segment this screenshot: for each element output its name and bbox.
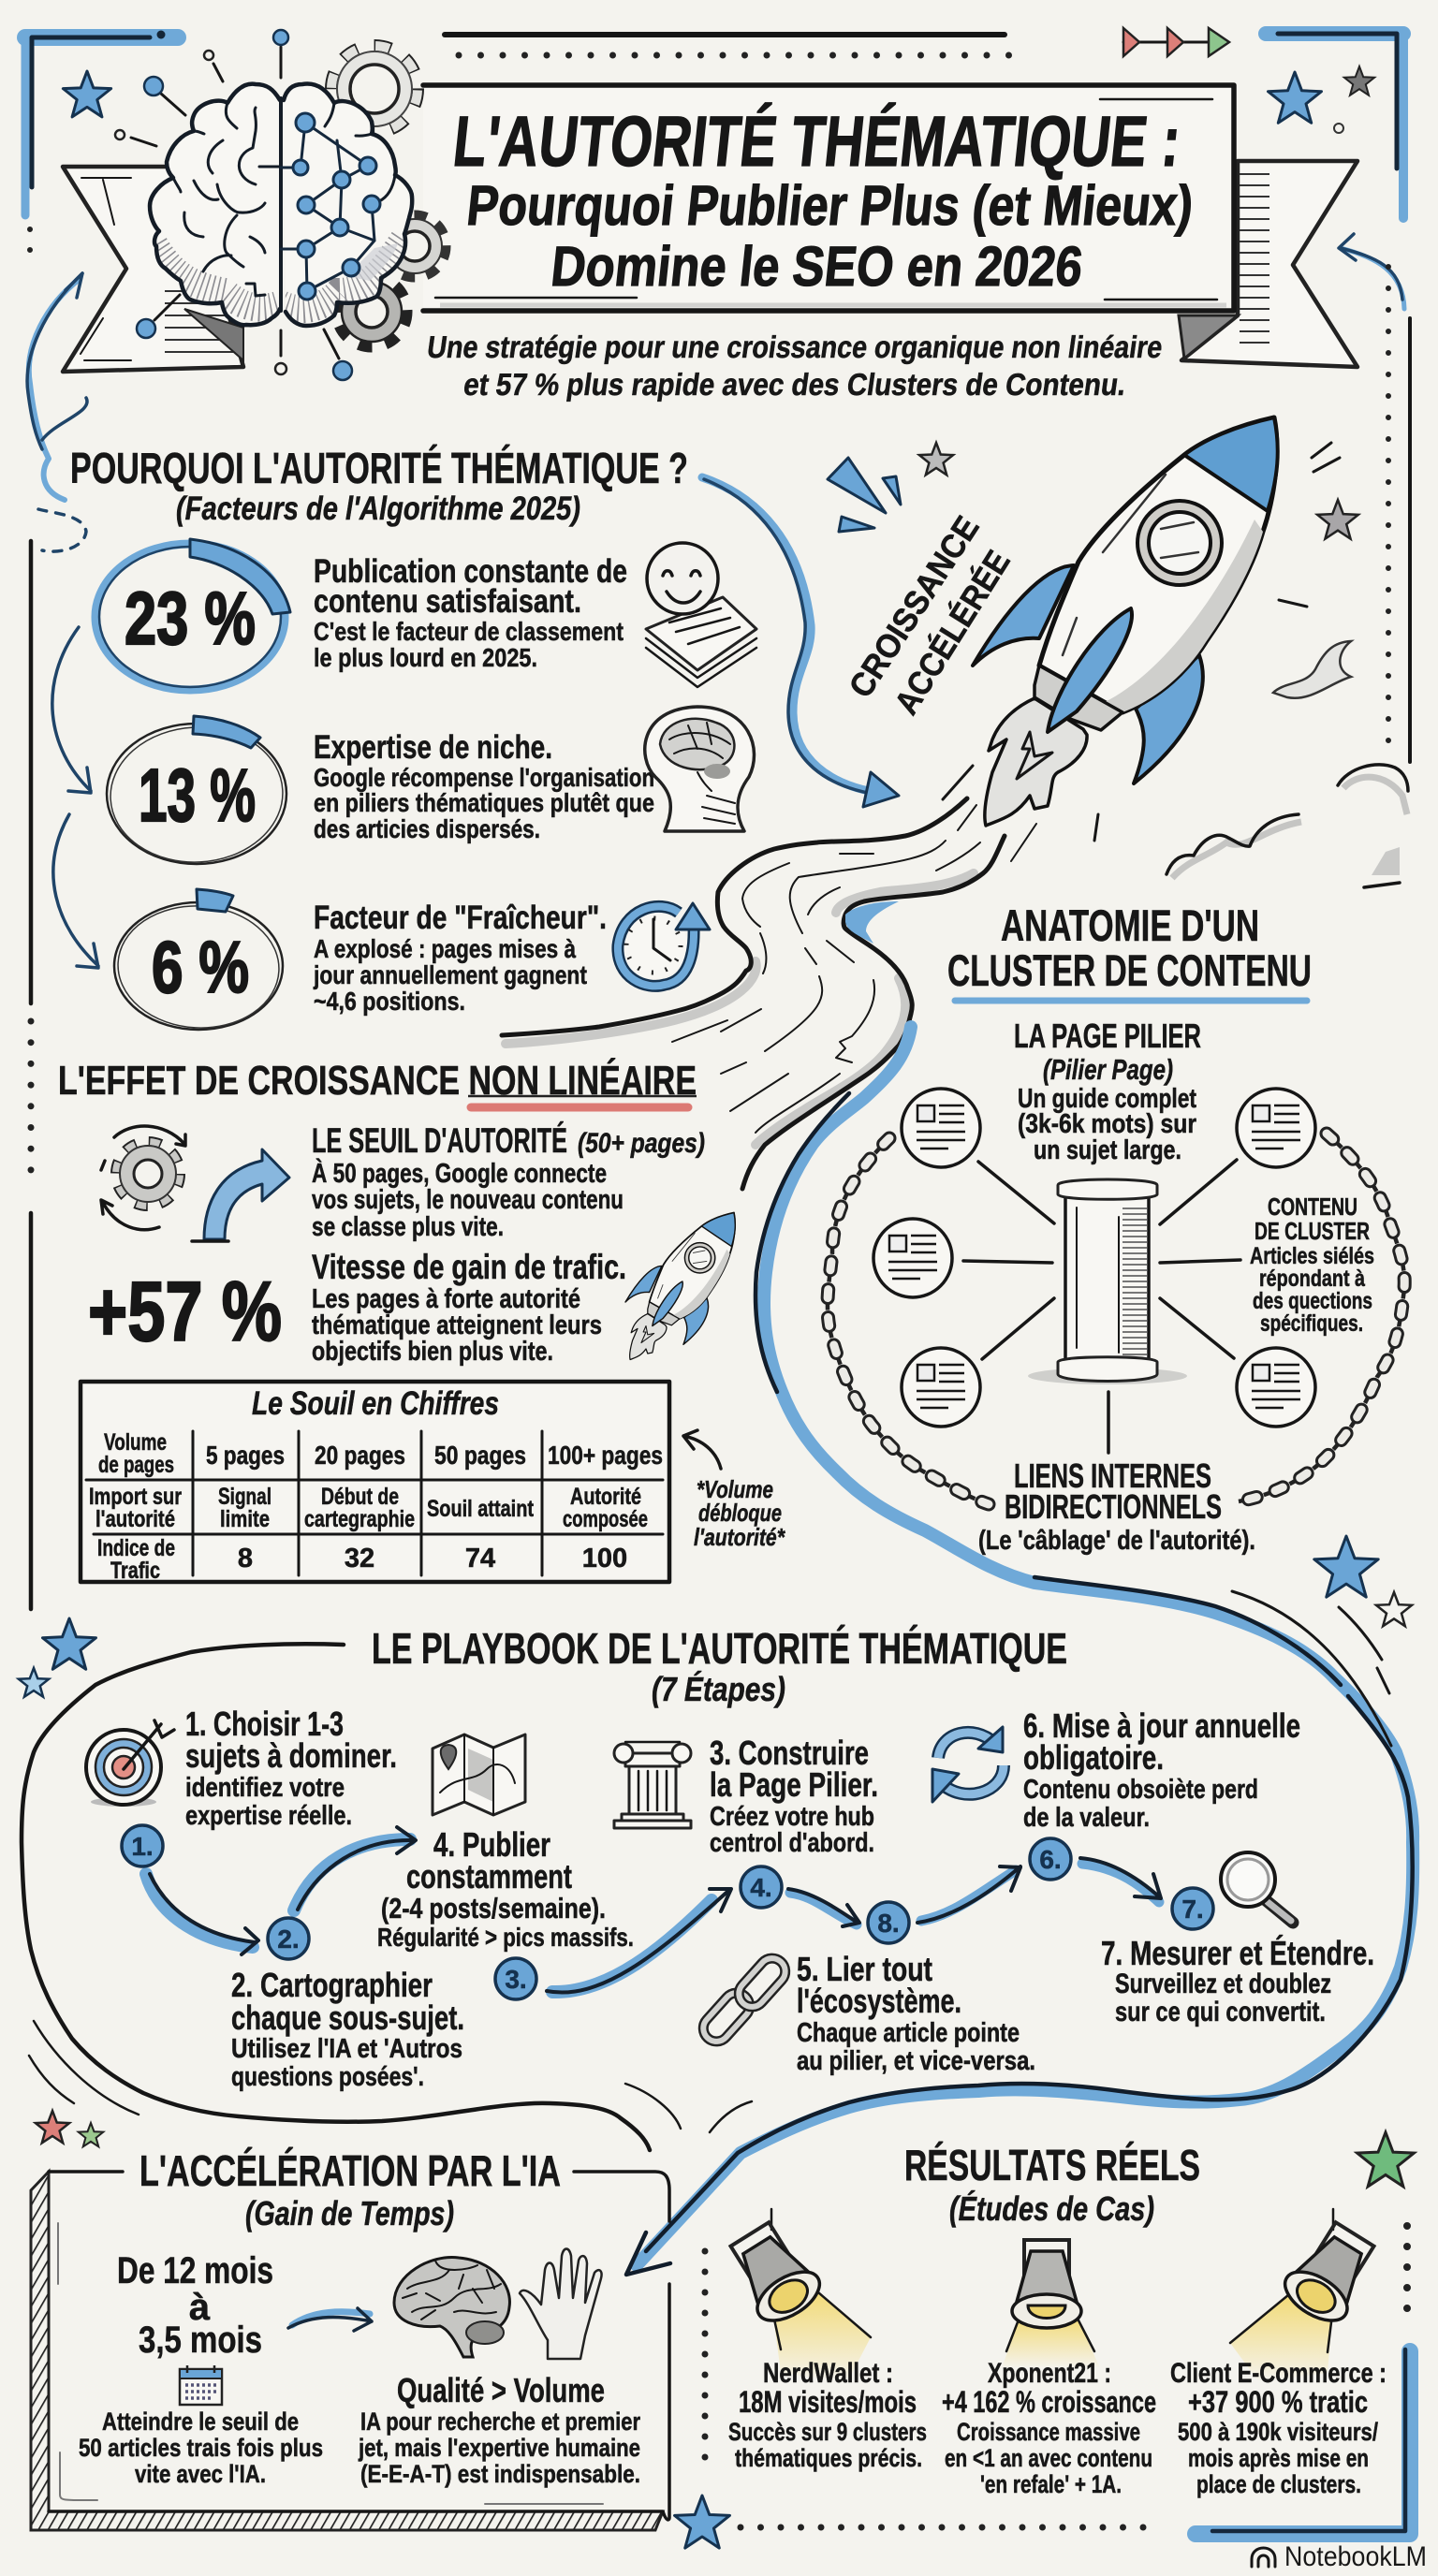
icon: blue curved arrow up right: [192, 1149, 289, 1241]
subtitle: et 57 % plus rapide avec des Clusters de Contenu.: [462, 368, 1128, 402]
table row: indice: 32: [345, 1544, 374, 1573]
text: la page pilier: Un guide complet: [1018, 1084, 1196, 1114]
text: contenu de cluster: spécifiques.: [1260, 1310, 1363, 1337]
panel: résultats réels: [720, 2141, 1387, 2498]
rotated label: croissance accélérée: ACCÉLÉRÉE: [887, 544, 1018, 721]
text: step 5: 5. Lier tout: [797, 1950, 932, 1988]
road gray shading: [506, 873, 974, 1145]
stat ring 13 %: 13 %: [139, 754, 256, 837]
stars left of playbook: [19, 1618, 103, 2146]
icon: chain link: [698, 1953, 790, 2047]
text: contenu de cluster: des quections: [1253, 1288, 1372, 1314]
case study: xponent21: +4 162 % croissance: [942, 2385, 1156, 2419]
table row: impact: Autorité: [570, 1484, 641, 1510]
icon: spotlight 1: [720, 2209, 871, 2382]
panel heading: (Gain de Temps): [245, 2194, 454, 2232]
table row: impact: Souil attaint: [427, 1496, 535, 1522]
section heading: pourquoi: POURQUOI L'AUTORITÉ THÉMATIQUE ?: [70, 444, 688, 492]
arrows between rings: [52, 627, 98, 968]
stat ring 23 %: [95, 539, 290, 690]
text: contenu de cluster: [1250, 1193, 1374, 1337]
case study: client e-commerce: +37 900 % tratic: [1188, 2385, 1368, 2419]
heading: playbook: [372, 1624, 1067, 1708]
numbered step circles: 7.: [1181, 1895, 1204, 1924]
table row: volume: 20 pages: [315, 1441, 405, 1470]
table row: impact: Début de: [321, 1484, 399, 1510]
case study: xponent21: Croissance massive: [957, 2418, 1140, 2446]
table row: volume: 100+ pages: [548, 1441, 663, 1470]
text: step 3: [710, 1734, 878, 1858]
numbered step circles: 6.: [1039, 1845, 1062, 1874]
text: atteindre le seuil: vite avec l'IA.: [135, 2460, 266, 2488]
arrow: blue S arrow to road: [702, 477, 899, 807]
icon: brain with network: [115, 30, 412, 380]
text: qualité volume: (E-E-A-T) est indispensable.: [360, 2460, 640, 2488]
text: expertise de niche: en piliers thématiques plutêt que: [314, 788, 654, 817]
case study: nerdwallet: 18M visites/mois: [739, 2385, 917, 2419]
text: qualité volume: jet, mais l'expertive humaine: [358, 2434, 640, 2462]
panel: accélération par l'IA: [31, 2146, 669, 2530]
text: expertise de niche: des articies dispersés.: [314, 814, 540, 843]
text: expertise de niche: [314, 729, 654, 843]
icon: spotlight 3: [1230, 2209, 1385, 2382]
clouds and squiggle: [1167, 641, 1408, 887]
text: la page pilier: [1014, 1017, 1201, 1165]
text: qualité volume: [358, 2371, 640, 2488]
stat ring 6 %: 6 %: [152, 926, 249, 1008]
heading résultats: (Études de Cas): [949, 2189, 1154, 2228]
main blue path: [626, 901, 1413, 2275]
text: contenu de cluster: CONTENU: [1268, 1193, 1357, 1221]
text: qualité volume: Qualité > Volume: [397, 2371, 605, 2409]
time reduction stat: [117, 2250, 273, 2361]
table row: indice: [97, 1535, 627, 1584]
heading: playbook: LE PLAYBOOK DE L'AUTORITÉ THÉMATIQUE: [372, 1624, 1067, 1673]
network nodes: [281, 113, 380, 300]
table row: impact: Import sur: [89, 1484, 182, 1510]
table row: impact: composée: [563, 1506, 648, 1532]
title text: Pourquoi Publier Plus (et Mieux): [464, 174, 1196, 237]
ribbon tails: [63, 161, 1357, 372]
text: fraicheur: ~4,6 positions.: [314, 987, 465, 1016]
icon: refresh arrows: [932, 1727, 1004, 1802]
text: liens internes: BIDIRECTIONNELS: [1005, 1487, 1222, 1526]
text: vitesse de gain: Vitesse de gain de trafic.: [312, 1248, 626, 1286]
section heading: pourquoi: (Facteurs de l'Algorithme 2025): [176, 490, 580, 527]
callout: volume débloque l'autorité: l'autorité*: [694, 1523, 786, 1551]
numbered step circles: 4.: [750, 1873, 772, 1902]
time reduction stat: à: [189, 2287, 211, 2328]
text: step 6: [1023, 1706, 1300, 1833]
numbered step circles: 3.: [505, 1965, 527, 1994]
icon: hand: [520, 2248, 602, 2359]
text: publication constante: Publication constante de: [314, 553, 627, 590]
text: seuil d'autorité: LE SEUIL D'AUTORITÉ: [312, 1121, 567, 1160]
text: step 6: Contenu obsoiète perd: [1023, 1775, 1258, 1805]
text: seuil d'autorité: [312, 1121, 705, 1242]
text: atteindre le seuil: [79, 2408, 323, 2488]
text: qualité volume: IA pour recherche et premier: [360, 2408, 640, 2436]
icon: pillar: [1028, 1179, 1187, 1384]
road flow lines: [672, 805, 1036, 1133]
callout: volume débloque l'autorité: [683, 1430, 786, 1551]
text: contenu de cluster: DE CLUSTER: [1255, 1217, 1370, 1245]
text: step 2: questions posées'.: [231, 2062, 424, 2092]
left rule and dots: [29, 541, 33, 1609]
title text: [449, 102, 1196, 298]
step flow arrows: [146, 1827, 1161, 1993]
case study: xponent21: 'en refale' + 1A.: [980, 2470, 1122, 2498]
panel heading: L'ACCÉLÉRATION PAR L'IA: [139, 2146, 561, 2195]
title banner panel: [423, 85, 1234, 311]
icon: spotlight 2: [1002, 2240, 1100, 2368]
icon: target: [86, 1720, 174, 1807]
heading: anatomie d'un cluster: [947, 900, 1312, 1001]
text: step 4: constamment: [406, 1857, 572, 1895]
text: la page pilier: un sujet large.: [1034, 1135, 1181, 1165]
text: step 6: de la valeur.: [1023, 1803, 1150, 1833]
icon: gears behind brain: [331, 46, 445, 345]
table: le seuil en chiffres: Le Souil en Chiffres: [252, 1385, 499, 1422]
text: seuil d'autorité: (50+ pages): [578, 1128, 705, 1159]
icon: gear with rotating arrows: [101, 1126, 185, 1230]
text: step 2: chaque sous-sujet.: [231, 1998, 464, 2037]
text: expertise de niche: Google récompense l'organisation: [314, 763, 654, 792]
case study: xponent21: Xponent21 :: [988, 2358, 1111, 2389]
brain shading: [154, 239, 404, 309]
text: atteindre le seuil: Atteindre le seuil de: [102, 2408, 299, 2436]
text: step 4: 4. Publier: [433, 1825, 550, 1864]
text: step 7: [1101, 1934, 1374, 2027]
stat ring 6 %: [114, 889, 283, 1032]
table row: impact: Signal: [218, 1484, 271, 1510]
text: la page pilier: LA PAGE PILIER: [1014, 1017, 1201, 1055]
text: step 6: 6. Mise à jour annuelle: [1023, 1706, 1300, 1745]
icon: magnifier: [1221, 1852, 1293, 1923]
callout: volume débloque l'autorité: débloque: [698, 1499, 782, 1527]
text: step 1: sujets à dominer.: [185, 1736, 397, 1775]
table row: impact: limite: [220, 1506, 270, 1532]
table row: volume: 50 pages: [434, 1441, 526, 1470]
panel heading: [139, 2146, 561, 2232]
text: step 5: Chaque article pointe: [797, 2018, 1020, 2048]
text: step 2: Utilisez l'IA et 'Autros: [231, 2034, 462, 2064]
frame: top right corner: [1266, 34, 1403, 218]
text: atteindre le seuil: 50 articles trais fois plus: [79, 2434, 323, 2462]
table: le seuil en chiffres: [81, 1382, 671, 1585]
text: expertise de niche: Expertise de niche.: [314, 729, 552, 766]
icon: brain: [394, 2258, 509, 2357]
text: step 2: 2. Cartographier: [231, 1966, 433, 2004]
case study: xponent21: en <1 an avec contenu: [945, 2444, 1152, 2472]
arrow: left curved blue arrow: [27, 273, 87, 551]
stars right of cluster: [1314, 1536, 1412, 1626]
case study: xponent21: [942, 2358, 1156, 2498]
top decorative line and dots: [445, 35, 1028, 55]
case study: client e-commerce: [1170, 2358, 1387, 2498]
heading: playbook: (7 Étapes): [652, 1670, 785, 1708]
case study: nerdwallet: NerdWallet :: [763, 2358, 893, 2389]
case study: nerdwallet: thématiques précis.: [735, 2444, 922, 2472]
icon: big rocket: [973, 417, 1278, 826]
text: step 2: [231, 1966, 464, 2092]
road swoosh: [502, 798, 1036, 1189]
title text: Domine le SEO en 2026: [549, 235, 1086, 298]
text: step 4: [377, 1825, 634, 1952]
callout: volume débloque l'autorité: *Volume: [697, 1475, 773, 1503]
text: step 4: Régularité > pics massifs.: [377, 1923, 634, 1952]
table row: indice: Trafic: [110, 1558, 160, 1584]
icon: small triangles top right: [1123, 28, 1229, 56]
table row: indice: 100: [582, 1544, 627, 1573]
subtitle: [425, 330, 1165, 402]
stat ring 13 %: [107, 716, 286, 867]
table row: volume: de pages: [98, 1452, 174, 1478]
text: publication constante: le plus lourd en 2025.: [314, 643, 537, 672]
icon: clock with arrow: [618, 903, 710, 986]
icon: right chain: [1239, 1134, 1404, 1501]
text: publication constante: contenu satisfaisant.: [314, 583, 581, 620]
numbered step circles: [122, 1825, 1213, 1999]
dotted dividers and stars bottom: [675, 2132, 1414, 2548]
text: liens internes: LIENS INTERNES: [1014, 1456, 1211, 1495]
text: step 3: Créez votre hub: [710, 1802, 874, 1832]
text: step 3: centrol d'abord.: [710, 1828, 874, 1858]
numbered step circles: 2.: [277, 1925, 300, 1954]
playbook outline curve: [22, 1644, 752, 2150]
stat +57 %: +57 %: [88, 1266, 282, 1359]
text: seuil d'autorité: vos sujets, le nouveau contenu: [312, 1185, 624, 1215]
text: step 5: au pilier, et vice-versa.: [797, 2046, 1035, 2076]
table row: volume: [98, 1429, 663, 1478]
text: step 4: (2-4 posts/semaine).: [381, 1892, 606, 1925]
icon: map: [433, 1734, 525, 1815]
text: publication constante: C'est le facteur de classement: [314, 617, 624, 646]
text: fraicheur: [313, 900, 607, 1016]
text: seuil d'autorité: À 50 pages, Google connecte: [312, 1157, 607, 1189]
icons: cluster documents: [873, 1089, 1315, 1427]
case study: client e-commerce: mois après mise en: [1188, 2444, 1369, 2472]
text: liens internes: (Le 'câblage' de l'autorité).: [978, 1526, 1255, 1556]
arrow: brain hand: [288, 2308, 372, 2331]
icon: left chain: [828, 1138, 989, 1504]
case study: client e-commerce: place de clusters.: [1196, 2470, 1361, 2498]
frame: bottom right corner: [1196, 2349, 1410, 2534]
time reduction stat: 3,5 mois: [139, 2320, 262, 2361]
text: fraicheur: jour annuellement gagnent: [313, 960, 587, 989]
rotated label: croissance accélérée: CROISSANCE: [841, 509, 987, 704]
text: vitesse de gain: thématique atteignent leurs: [312, 1310, 602, 1340]
table row: volume: 5 pages: [206, 1441, 285, 1470]
text: vitesse de gain: objectifs bien plus vite.: [312, 1337, 553, 1367]
table row: impact: [89, 1484, 648, 1532]
heading résultats: [904, 2141, 1200, 2228]
stars header: [63, 66, 1374, 133]
section heading: pourquoi: [70, 444, 688, 527]
table row: indice: 74: [465, 1544, 495, 1573]
text: publication constante: [314, 553, 627, 672]
text: step 7: Surveillez et doublez: [1115, 1969, 1331, 1999]
time reduction stat: De 12 mois: [117, 2250, 273, 2291]
stat ring 23 %: 23 %: [125, 577, 256, 660]
case study: nerdwallet: Succès sur 9 clusters: [728, 2418, 927, 2446]
case study: nerdwallet: [728, 2358, 927, 2472]
text: fraicheur: Facteur de "Fraîcheur".: [314, 900, 607, 936]
text: fraicheur: A explosé : pages mises à: [314, 934, 576, 963]
text: vitesse de gain: [312, 1248, 626, 1367]
text: la page pilier: (3k-6k mots) sur: [1018, 1109, 1196, 1139]
table row: indice: Indice de: [97, 1535, 175, 1561]
brain connector pins: [115, 30, 352, 380]
text: step 3: la Page Pilier.: [710, 1765, 878, 1804]
table row: volume: Volume: [104, 1429, 167, 1456]
text: vitesse de gain: Les pages à forte autorité: [312, 1284, 580, 1314]
text: step 7: sur ce qui convertit.: [1115, 1997, 1326, 2027]
text: step 1: 1. Choisir 1-3: [185, 1705, 344, 1743]
numbered step circles: 1.: [131, 1832, 154, 1861]
icon: ionic column: [614, 1742, 691, 1828]
table row: indice: 8: [238, 1544, 253, 1573]
text: liens internes: [978, 1456, 1255, 1556]
icon: smiley on papers: [646, 543, 756, 687]
text: la page pilier: (Pilier Page): [1043, 1053, 1173, 1086]
case study: client e-commerce: 500 à 190k visiteurs/: [1178, 2418, 1378, 2446]
heading: effet non lineaire: L'EFFET DE CROISSANCE NON LINÉAIRE: [58, 1057, 697, 1104]
text: contenu de cluster: répondant à: [1259, 1266, 1365, 1292]
table row: impact: cartegraphie: [304, 1506, 415, 1532]
arrow: right curved return arrow and dotted column: [1339, 234, 1410, 762]
icon: calendar: [180, 2365, 222, 2405]
decoration: burst triangles and stars: [828, 443, 1358, 841]
icon: small rocket: [625, 1213, 735, 1360]
text: contenu de cluster: Articles siélés: [1250, 1243, 1374, 1269]
connector spokes: [963, 1160, 1240, 1453]
table row: impact: l'autorité: [95, 1506, 175, 1532]
text: step 1: [185, 1705, 397, 1831]
title text: L'AUTORITÉ THÉMATIQUE :: [449, 102, 1184, 182]
numbered step circles: 8.: [877, 1909, 900, 1938]
text: step 1: identifiez votre: [185, 1773, 345, 1803]
text: seuil d'autorité: se classe plus vite.: [312, 1212, 504, 1242]
text: step 5: l'écosystème.: [797, 1982, 961, 2020]
text: step 1: expertise réelle.: [185, 1801, 352, 1831]
text: step 5: [797, 1950, 1035, 2076]
subtitle: Une stratégie pour une croissance organique non linéaire: [425, 330, 1165, 365]
heading: anatomie d'un cluster: ANATOMIE D'UN: [1001, 900, 1259, 950]
text: step 3: 3. Construire: [710, 1734, 869, 1772]
icon: head with brain: [645, 707, 754, 831]
heading résultats: RÉSULTATS RÉELS: [904, 2141, 1200, 2189]
text: step 6: obligatoire.: [1023, 1738, 1164, 1777]
frame: top left corner: [25, 30, 178, 253]
